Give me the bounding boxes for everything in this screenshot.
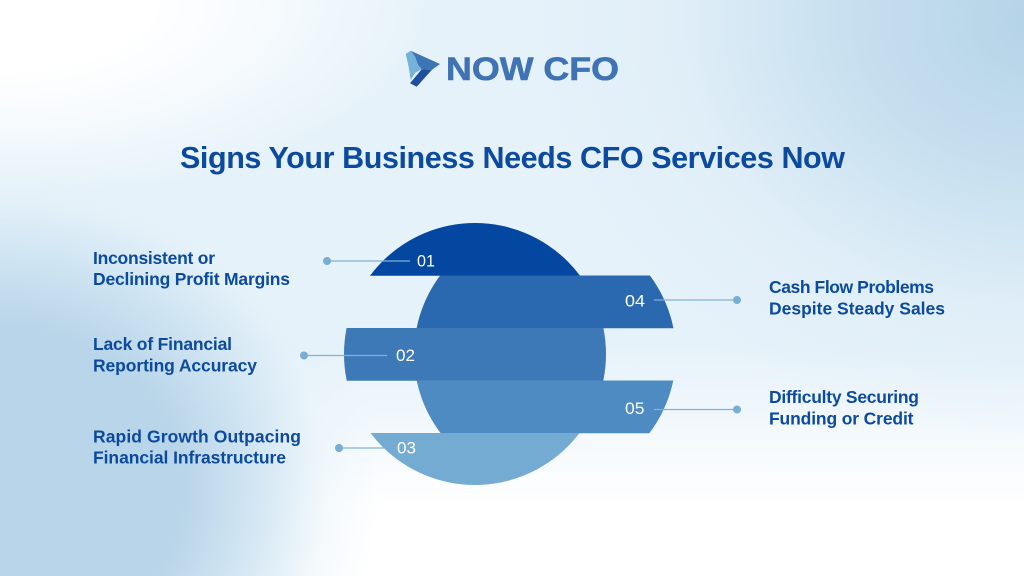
label 03: Financial Infrastructure (93, 448, 286, 468)
slice 03 (370, 433, 580, 485)
label 05: Funding or Credit (769, 408, 914, 428)
logo icon (406, 51, 440, 87)
label 01: Declining Profit Margins (93, 269, 290, 289)
connector 04 (654, 296, 741, 304)
label 01: Inconsistent or (93, 248, 215, 268)
label 03: Rapid Growth Outpacing (93, 426, 301, 446)
label 04: Cash Flow Problems (769, 277, 934, 297)
connector 01 (323, 257, 410, 265)
label 04 (769, 277, 945, 318)
title: Signs Your Business Needs CFO Services Now (180, 141, 845, 175)
label 04: Despite Steady Sales (769, 298, 945, 318)
number 05: 05 (625, 400, 644, 418)
number 03: 03 (397, 440, 416, 458)
label 05 (769, 387, 919, 428)
slice 01 (370, 223, 580, 276)
connector 02 (300, 352, 387, 360)
logo: NOW CFO (406, 51, 619, 87)
label 02: Lack of Financial (93, 334, 232, 354)
number 02: 02 (396, 347, 415, 365)
logo wordmark: NOW CFO (446, 51, 619, 87)
connector 03 (335, 444, 386, 452)
label 05: Difficulty Securing (769, 387, 919, 407)
label 01 (93, 248, 290, 289)
slice 05 (416, 380, 674, 434)
label 02 (93, 334, 257, 376)
sliced circle diagram (344, 223, 676, 485)
slice 04 (416, 276, 674, 328)
number 04: 04 (625, 292, 645, 310)
label 02: Reporting Accuracy (93, 356, 257, 376)
number 01: 01 (417, 252, 435, 270)
label 03 (93, 426, 301, 468)
connector 05 (654, 406, 741, 414)
slice 02 (344, 328, 606, 381)
